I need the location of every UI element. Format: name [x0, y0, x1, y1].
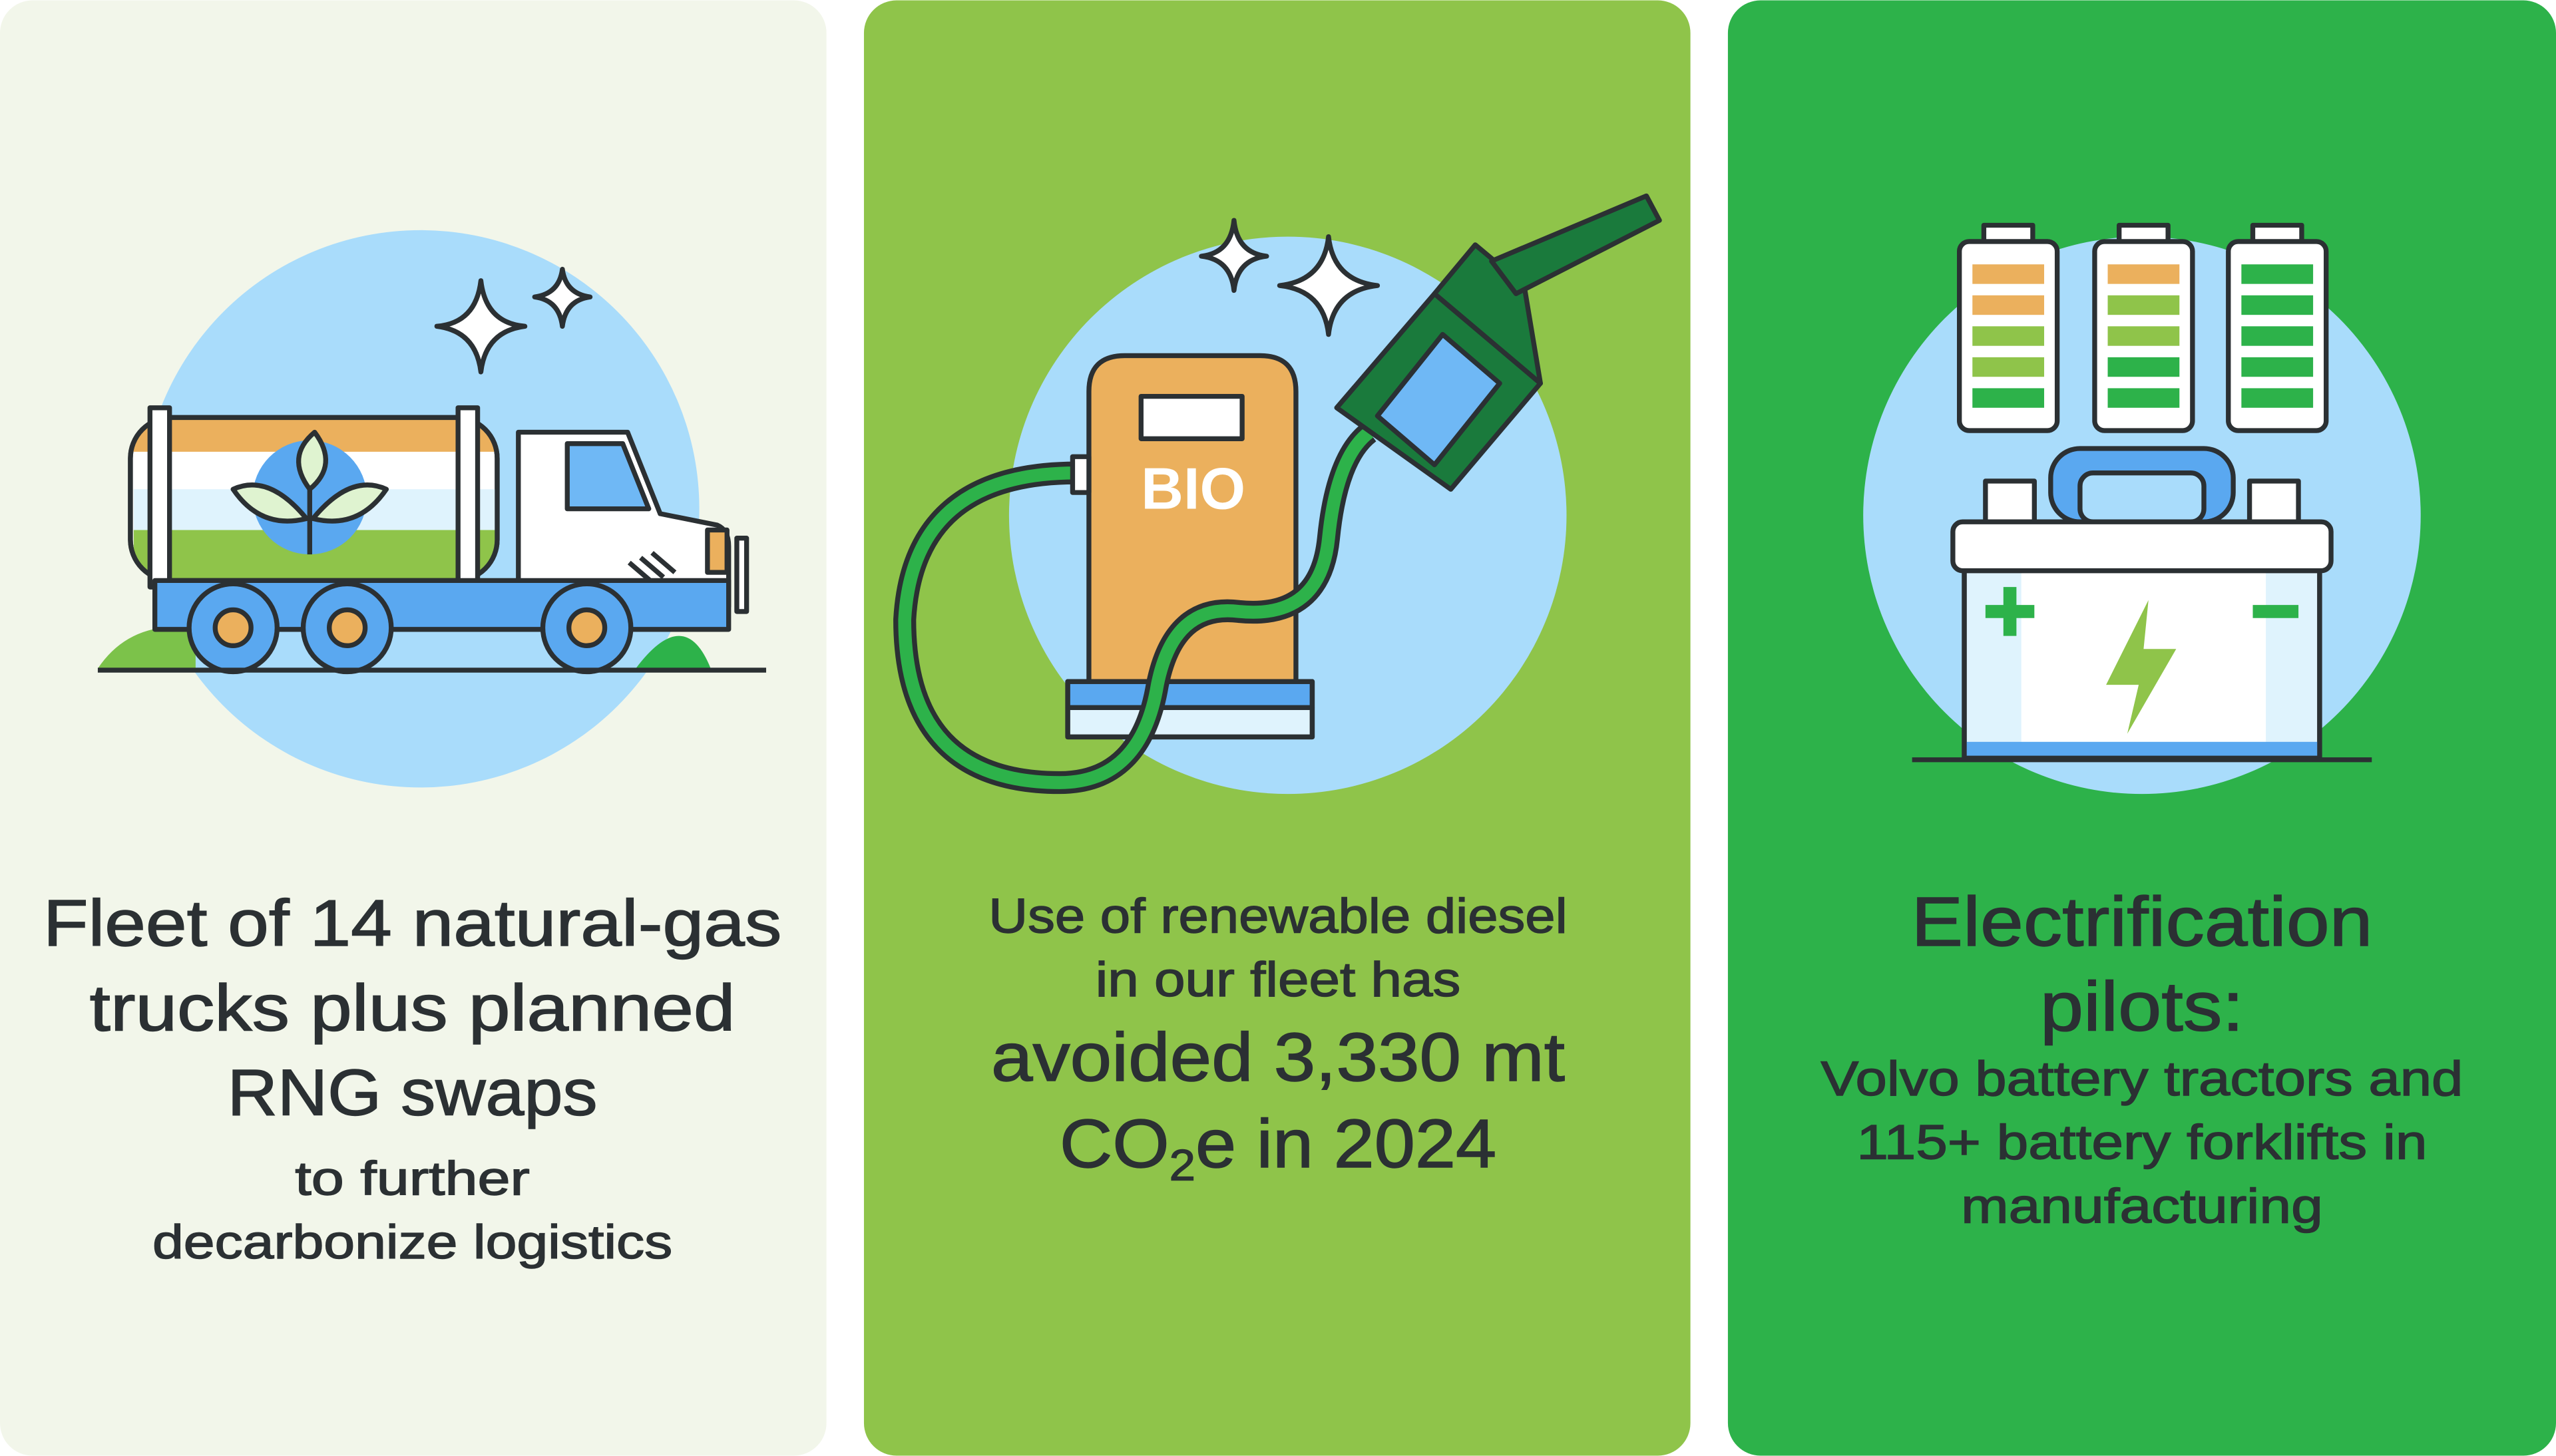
text: fleet headline: decarbonize logistics: [152, 1216, 672, 1269]
icon: fuel pump: BIO: [1141, 456, 1245, 522]
text: renewable diesel stat: Use of renewable diesel: [988, 888, 1568, 943]
text: fleet headline: Fleet of 14 natural-gas: [43, 886, 781, 960]
icon: truck: [98, 230, 766, 787]
text: renewable diesel stat: e in 2024: [1195, 1105, 1496, 1182]
text: renewable diesel stat: avoided 3,330 mt: [991, 1019, 1565, 1095]
panel: natural gas trucks: [0, 1, 827, 1455]
text: renewable diesel stat: CO: [1060, 1105, 1162, 1182]
text: electrification pilots: pilots:: [2040, 968, 2244, 1045]
text: fleet headline: to further: [295, 1153, 530, 1206]
text: renewable diesel stat: [988, 888, 1568, 1190]
text: renewable diesel stat: in our fleet has: [1096, 952, 1460, 1007]
icon: fuel pump: [905, 196, 1659, 794]
text: electrification pilots: [1821, 883, 2463, 1233]
text: electrification pilots: 115+ battery forklifts in: [1856, 1115, 2428, 1170]
icon: batteries: [1863, 225, 2421, 794]
panel: electrification: [1728, 1, 2556, 1455]
text: electrification pilots: Volvo battery tractors and: [1821, 1051, 2463, 1106]
text: fleet headline: RNG swaps: [228, 1056, 598, 1129]
panel: renewable diesel: [864, 1, 1691, 1455]
text: fleet headline: trucks plus planned: [90, 971, 735, 1044]
text: renewable diesel stat: 2: [1170, 1141, 1195, 1190]
text: electrification pilots: Electrification: [1911, 883, 2372, 961]
text: electrification pilots: manufacturing: [1961, 1178, 2323, 1233]
text: fleet headline: [43, 886, 781, 1269]
